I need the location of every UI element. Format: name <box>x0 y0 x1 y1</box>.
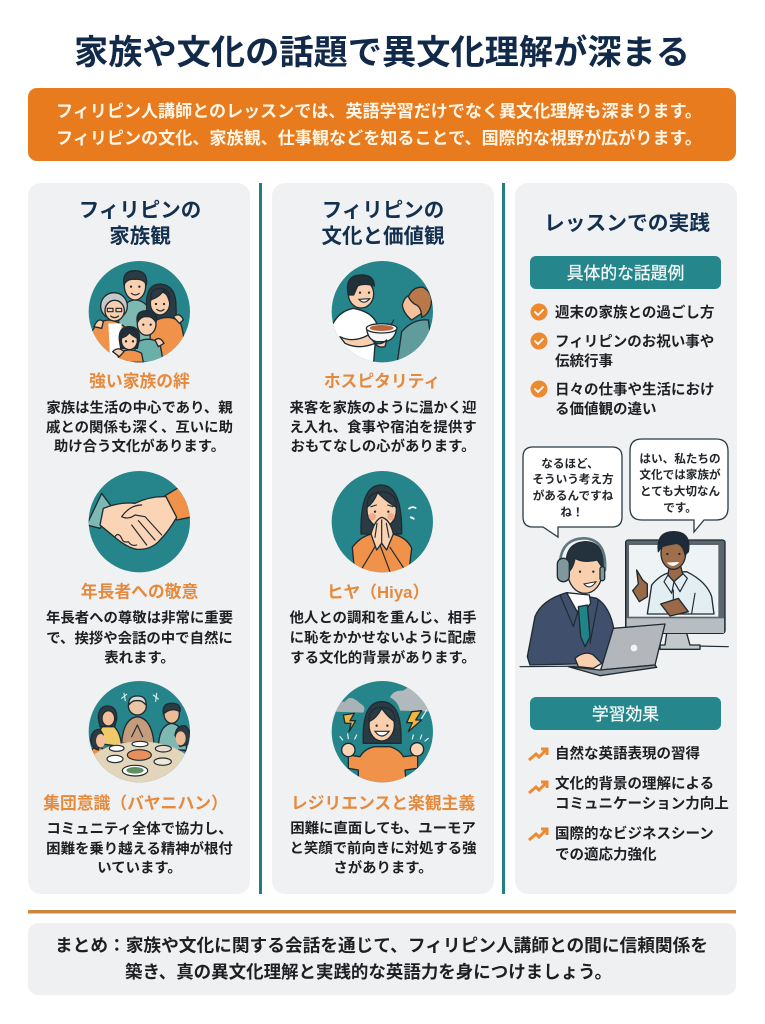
summary box <box>28 923 736 995</box>
text: respect for elders: 年長者への尊敬は非常に重要 <box>46 608 233 626</box>
text: hospitality: 来客を家族のように温かく迎 <box>289 398 477 416</box>
item: differences in values <box>530 380 714 418</box>
student <box>527 538 614 665</box>
text: hospitality <box>289 398 477 455</box>
divider: left <box>259 183 262 894</box>
text: strong family bonds: 戚との関係も深く、互いに助 <box>46 418 233 436</box>
heading: family values: フィリピンの <box>79 199 201 222</box>
bar: topic examples: 具体的な話題例 <box>567 264 684 283</box>
text: group consciousness: コミュニティ全体で協力し、 <box>46 820 233 838</box>
item: business adaptability <box>529 824 714 864</box>
text: hiya: 他人との調和を重んじ、相手 <box>290 610 476 626</box>
text: group consciousness <box>46 820 233 876</box>
text: hospitality: え入れ、食事や宿泊を提供す <box>289 418 477 436</box>
list: learning effects <box>529 744 729 864</box>
bar: topic examples <box>530 256 721 289</box>
text: respect for elders <box>46 608 233 666</box>
icon: hospitality <box>330 261 435 367</box>
text: group consciousness: いています。 <box>97 860 182 876</box>
text: hiya <box>290 610 476 666</box>
list: topic examples <box>530 304 714 418</box>
panel: culture and values <box>272 183 494 894</box>
bar: learning effects: 学習効果 <box>592 705 659 724</box>
text: strong family bonds: 助け合う文化があります。 <box>54 437 225 455</box>
icon: hiya <box>332 471 433 577</box>
text: resilience and optimism <box>289 819 477 876</box>
text: resilience and optimism: さがあります。 <box>333 858 433 876</box>
subheading: hiya: ヒヤ（Hiya） <box>327 583 429 602</box>
item: celebrations and traditions <box>530 332 714 370</box>
text: hiya: する文化的背景があります。 <box>290 648 476 666</box>
subheading: respect for elders: 年長者への敬意 <box>81 582 198 602</box>
heading: lesson practice: レッスンでの実践 <box>544 212 711 235</box>
heading: culture and values: フィリピンの <box>322 199 444 222</box>
panel: family values <box>28 183 250 894</box>
icon: resilience <box>332 681 435 787</box>
speech bubble: teacher: はい、私たちの <box>639 452 721 466</box>
text: respect for elders: 表れます。 <box>104 648 175 666</box>
speech bubble: student: なるほど、 <box>541 456 599 470</box>
speech bubble: student: そういう考え方 <box>532 472 614 486</box>
item: communication skills: 文化的背景の理解による <box>555 774 714 792</box>
item: communication skills: コミュニケーション力向上 <box>555 796 729 812</box>
icon: group meal <box>88 681 190 782</box>
text: hospitality: おもてなしの心があります。 <box>290 437 476 455</box>
speech bubble: teacher: です。 <box>663 502 697 514</box>
teacher <box>633 532 714 616</box>
summary box: まとめ：家族や文化に関する会話を通じて、フィリピン人講師との間に信頼関係を <box>55 936 708 956</box>
divider: right <box>502 183 505 894</box>
item: business adaptability: での適応力強化 <box>555 846 657 864</box>
item: business adaptability: 国際的なビジネスシーン <box>555 824 714 842</box>
title: 家族や文化の話題で異文化理解が深まる <box>74 33 690 72</box>
rule above summary <box>28 910 736 914</box>
item: communication skills <box>529 774 729 812</box>
subheading: group consciousness: 集団意識（バヤニハン） <box>43 794 228 813</box>
speech bubble: teacher: 文化では家族が <box>639 468 721 482</box>
subheading: hospitality: ホスピタリティ <box>324 372 440 391</box>
text: group consciousness: 困難を乗り越える精神が根付 <box>46 840 233 858</box>
item: weekend with family: 週末の家族との過ごし方 <box>555 304 714 322</box>
intro banner: フィリピン人講師とのレッスンでは、英語学習だけでなく異文化理解も深まります。 <box>56 101 702 121</box>
intro banner <box>28 88 736 161</box>
speech bubble: student: があるんですね <box>533 488 614 502</box>
item: natural English: 自然な英語表現の習得 <box>555 744 700 762</box>
heading: culture and values: 文化と価値観 <box>322 225 445 248</box>
heading: family values: 家族観 <box>109 225 171 248</box>
laptop <box>568 624 665 676</box>
item: differences in values: 日々の仕事や生活におけ <box>555 380 714 398</box>
bar: learning effects <box>530 697 721 730</box>
heading: culture and values <box>322 199 445 248</box>
subheading: resilience and optimism: レジリエンスと楽観主義 <box>291 793 475 813</box>
text: respect for elders: で、挨拶や会話の中で自然に <box>46 629 233 647</box>
icon: family portrait <box>89 261 190 362</box>
icon: handshake <box>87 471 193 572</box>
subheading: strong family bonds: 強い家族の絆 <box>89 371 190 391</box>
monitor <box>626 540 725 649</box>
speech bubble: teacher: とても大切なん <box>640 484 721 498</box>
speech bubble: teacher <box>630 439 728 532</box>
text: strong family bonds: 家族は生活の中心であり、親 <box>46 398 233 416</box>
item: celebrations and traditions: フィリピンのお祝い事や <box>555 332 714 350</box>
text: strong family bonds <box>46 398 233 455</box>
item: differences in values: る価値観の違い <box>555 400 656 418</box>
intro banner: フィリピンの文化、家族観、仕事観などを知ることで、国際的な視野が広がります。 <box>56 128 702 148</box>
illustration: online lesson <box>520 532 728 676</box>
text: resilience and optimism: と笑顔で前向きに対処する強 <box>289 839 477 857</box>
text: hiya: に恥をかかせないように配慮 <box>290 630 476 646</box>
panel: lesson practice <box>515 183 737 894</box>
heading: family values <box>79 199 201 248</box>
speech bubble: student: ね！ <box>560 506 584 519</box>
speech bubble: student <box>523 447 622 537</box>
text: resilience and optimism: 困難に直面しても、ユーモア <box>290 819 476 837</box>
summary box: 築き、真の異文化理解と実践的な英語力を身につけましょう。 <box>125 962 612 982</box>
item: celebrations and traditions: 伝統行事 <box>555 352 613 370</box>
